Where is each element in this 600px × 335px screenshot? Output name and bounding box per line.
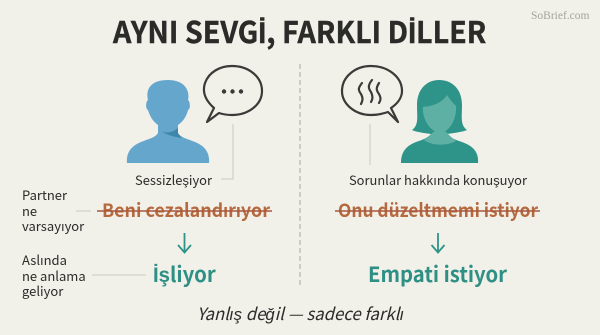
icon: woman silhouette (401, 80, 478, 163)
connector: silent label to bubble (221, 124, 233, 179)
label: Sessizleşiyor: Sessizleşiyor (135, 170, 213, 189)
label: Partner ne varsayıyor: ne (22, 201, 37, 220)
label: Partner ne varsayıyor: varsayıyor (22, 216, 85, 235)
label: Aslında ne anlama geliyor: geliyor (22, 281, 64, 300)
struck text: Onu düzeltmemi istiyor: Onu düzeltmemi istiyor (338, 197, 539, 223)
icon: speech bubble with steam lines (342, 66, 402, 122)
icon: speech bubble with dots (204, 66, 262, 122)
connector: talking label to bubble (369, 124, 371, 165)
arrow: left down (178, 233, 191, 252)
result: Empati istiyor: Empati istiyor (368, 259, 508, 289)
label: Aslında ne anlama geliyor: ne anlama (22, 266, 86, 285)
icon: man silhouette (127, 80, 209, 163)
arrow: right down (432, 233, 444, 252)
label: Sorunlar hakkında konuşuyor: Sorunlar hakkında konuşuyor (349, 170, 528, 189)
label: Partner ne varsayıyor: Partner (22, 185, 68, 204)
struck text: Beni cezalandırıyor: Beni cezalandırıyor (102, 197, 271, 223)
label: Aslında ne anlama geliyor: Aslında (22, 250, 67, 269)
footer tagline: Yanlış değil — sadece farklı (197, 300, 404, 325)
label: Partner ne varsayıyor (22, 185, 85, 235)
result: İşliyor: İşliyor (153, 258, 217, 288)
title: AYNI SEVGİ, FARKLI DİLLER (112, 9, 486, 52)
label: Aslında ne anlama geliyor (22, 250, 86, 300)
watermark: SoBrief.com (531, 10, 590, 22)
